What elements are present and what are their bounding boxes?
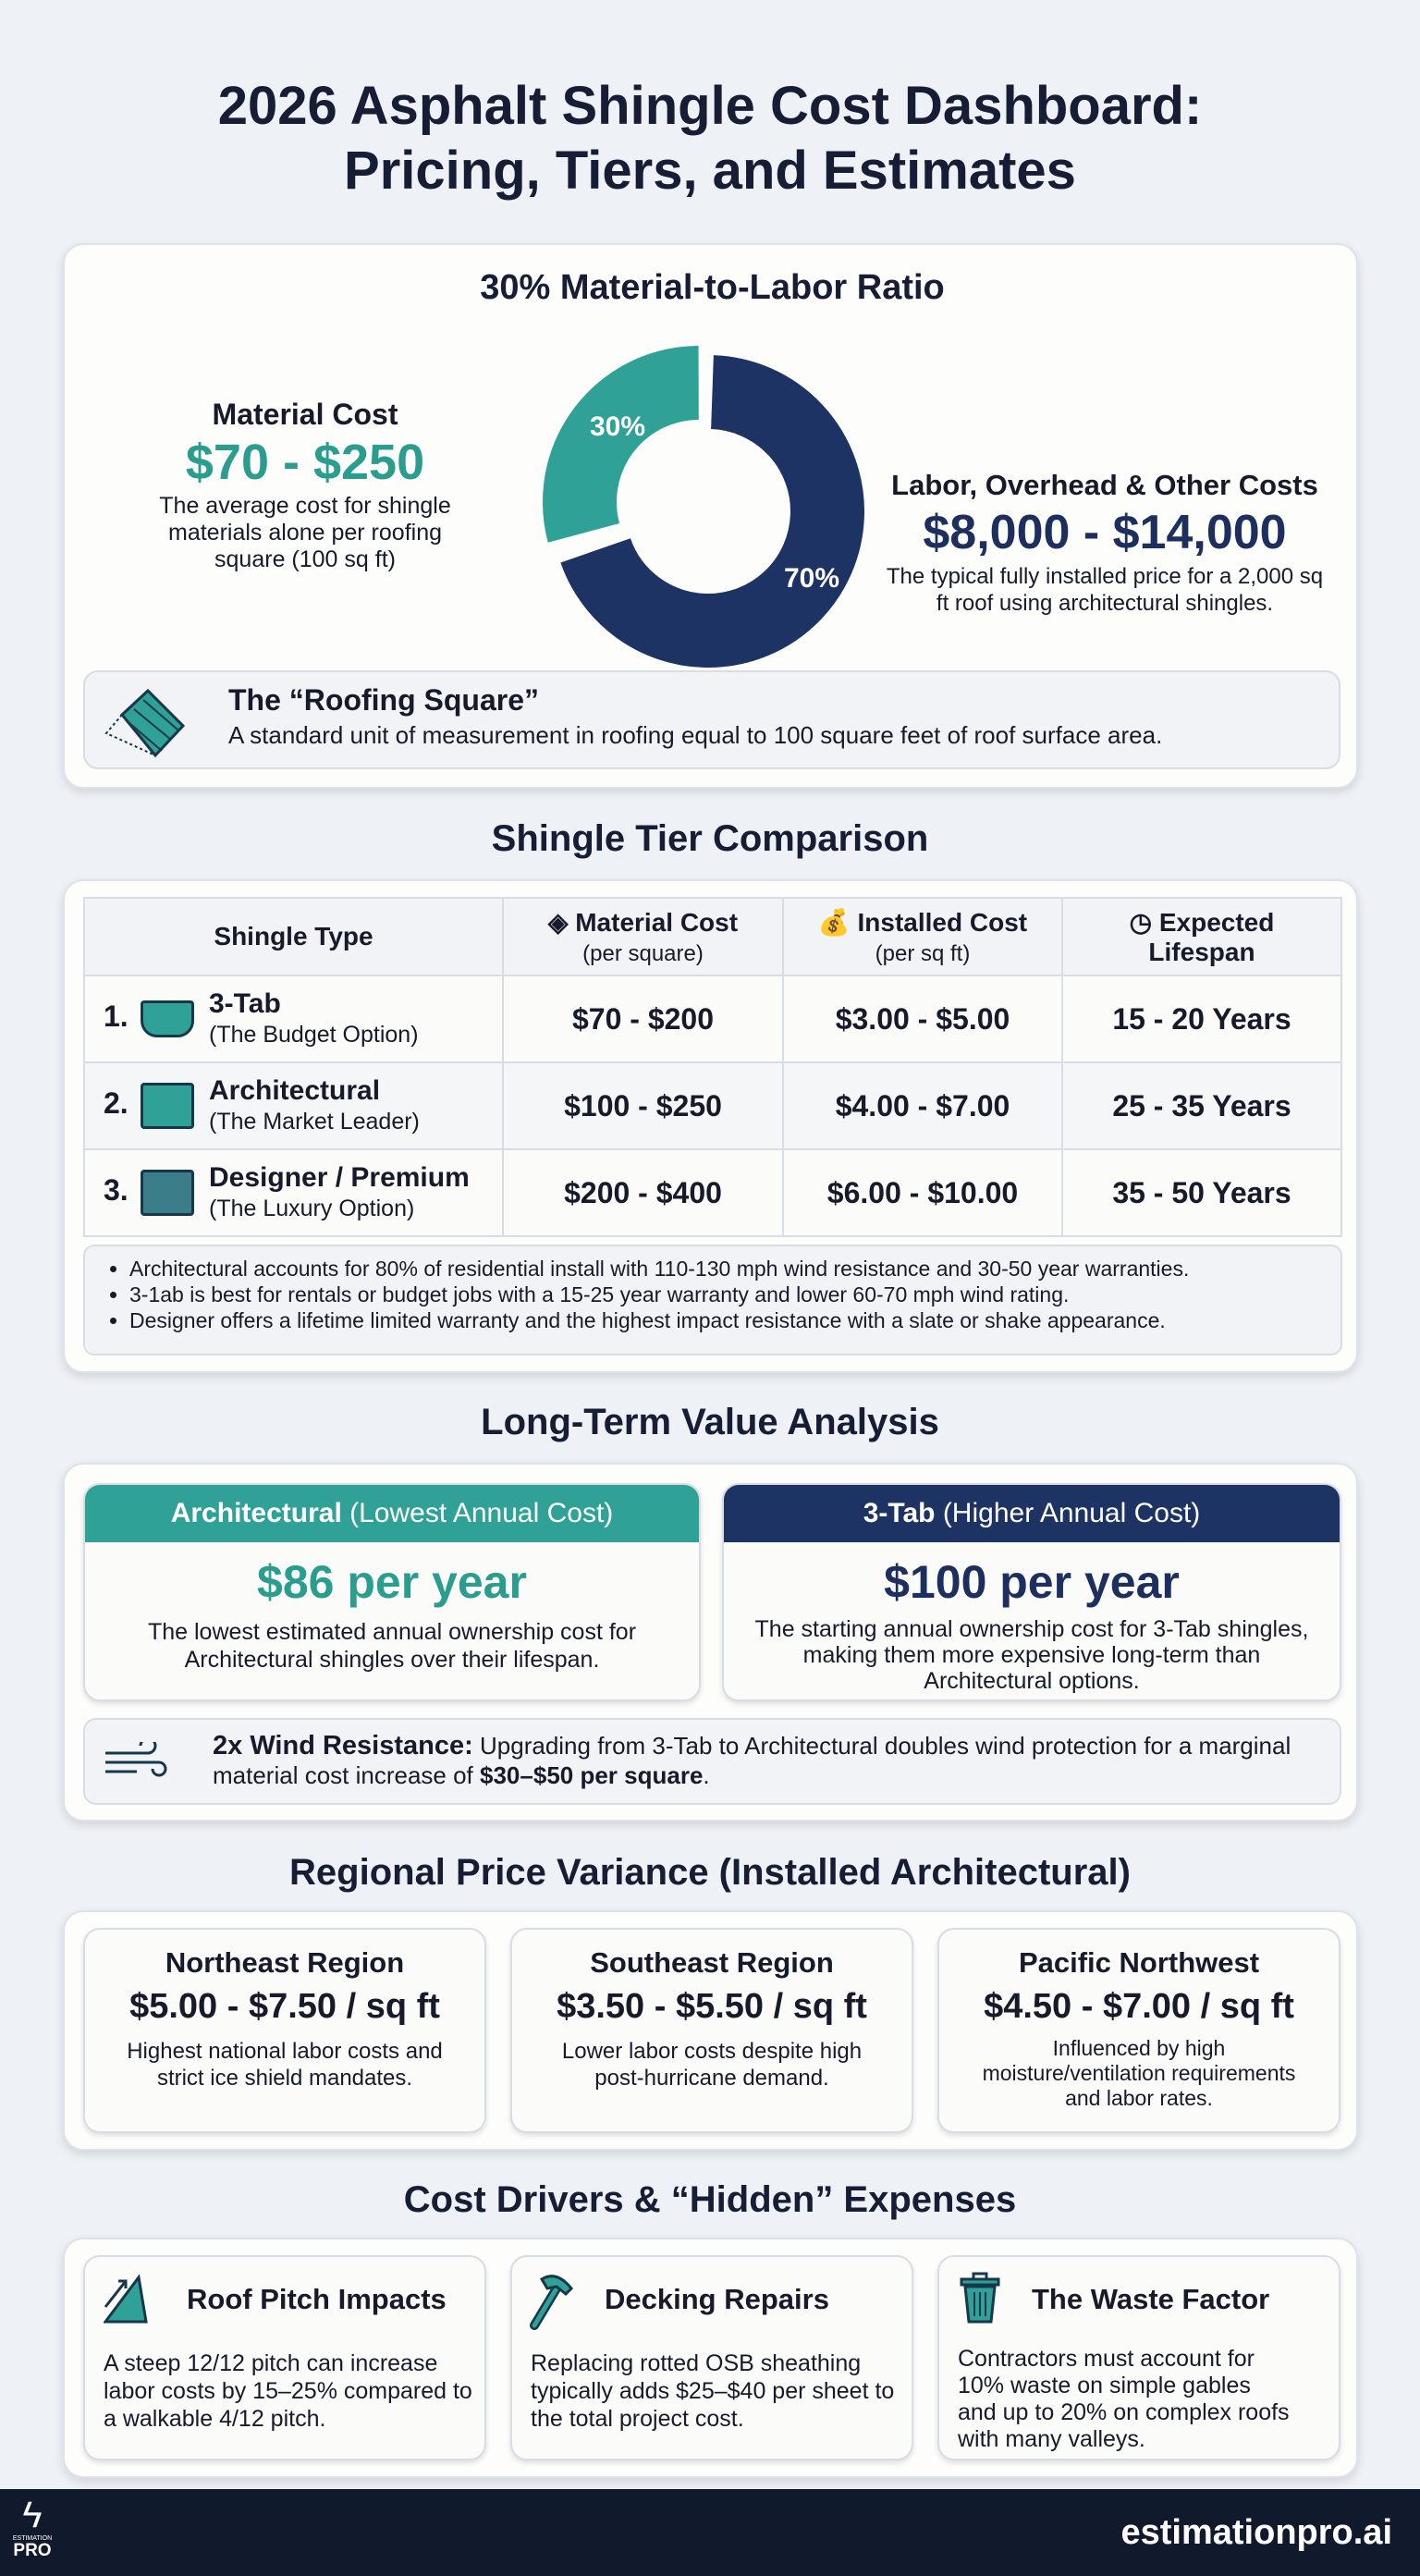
table bbox=[83, 897, 1342, 1237]
table: 15 - 20 Years bbox=[1112, 1002, 1291, 1036]
table: $4.00 - $7.00 bbox=[836, 1089, 1010, 1122]
table: Designer / Premium bbox=[209, 1161, 470, 1193]
panel: material-to-labor ratio bbox=[63, 243, 1358, 789]
table: $200 - $400 bbox=[564, 1176, 722, 1209]
panel: regional bbox=[63, 1910, 1358, 2151]
donut chart: 70% bbox=[784, 563, 839, 594]
material cost block bbox=[159, 398, 451, 572]
heading: long-term value: Long-Term Value Analysis bbox=[481, 1402, 939, 1442]
table: $3.00 - $5.00 bbox=[836, 1002, 1010, 1036]
logo bbox=[13, 2495, 52, 2560]
card: architectural bbox=[83, 1483, 701, 1701]
icon: roof square bbox=[104, 689, 185, 758]
table: $70 - $200 bbox=[572, 1002, 714, 1036]
logo: ϟ bbox=[22, 2495, 43, 2535]
table: (per square) bbox=[582, 941, 704, 965]
logo: PRO bbox=[13, 2541, 52, 2560]
table: 35 - 50 Years bbox=[1112, 1176, 1291, 1209]
table: Lifespan bbox=[1148, 938, 1255, 965]
icon: hammer bbox=[530, 2275, 573, 2330]
table: 1. bbox=[104, 1000, 129, 1033]
title bbox=[218, 76, 1202, 201]
card: southeast: $3.50 - $5.50 / sq ft bbox=[557, 1987, 867, 2026]
table: ◷ Expected bbox=[1130, 908, 1274, 936]
wind resistance callout: 2x Wind Resistance: Upgrading from 3-Tab to Architectural doubles wind protection for a marginal material cost increase of $30–$50 per square. bbox=[213, 1731, 1291, 1789]
material cost block: The average cost for shingle materials alone per roofing square (100 sq ft) bbox=[159, 493, 451, 572]
footer bbox=[0, 2489, 1420, 2576]
donut chart: 30% bbox=[590, 411, 645, 442]
card: southeast: post-hurricane demand. bbox=[594, 2066, 829, 2091]
wind resistance callout bbox=[83, 1718, 1341, 1805]
card: 3-tab: 3-Tab (Higher Annual Cost) bbox=[863, 1498, 1200, 1528]
table: 2. bbox=[104, 1086, 129, 1120]
card: 3-tab: The starting annual ownership cost for 3-Tab shingles, making them more expensive long-term than Architectural options. bbox=[755, 1616, 1308, 1694]
card: northeast: Northeast Region bbox=[165, 1946, 404, 1979]
card: 3-tab bbox=[722, 1483, 1341, 1701]
labor cost block bbox=[887, 469, 1323, 616]
title: Pricing, Tiers, and Estimates bbox=[344, 141, 1076, 201]
card: pacific northwest: $4.50 - $7.00 / sq ft bbox=[984, 1987, 1294, 2026]
logo: ESTIMATION bbox=[13, 2535, 52, 2542]
table: (The Luxury Option) bbox=[209, 1195, 414, 1221]
icon: pitch bbox=[104, 2274, 148, 2323]
table: Shingle Type bbox=[214, 922, 373, 951]
card: architectural: The lowest estimated annual ownership cost for Architectural shingles over their lifespan. bbox=[148, 1619, 636, 1673]
text: roofing square bbox=[228, 683, 1162, 749]
heading: regional variance: Regional Price Variance (Installed Architectural) bbox=[289, 1852, 1131, 1893]
table: $6.00 - $10.00 bbox=[827, 1176, 1018, 1209]
card: southeast: Southeast Region bbox=[590, 1946, 834, 1979]
table: 3-Tab bbox=[209, 987, 281, 1019]
table: 💰 Installed Cost bbox=[818, 908, 1027, 936]
card: southeast bbox=[510, 1928, 913, 2133]
table: (per sq ft) bbox=[875, 941, 970, 965]
text: roofing square: The “Roofing Square” bbox=[228, 683, 539, 717]
card: northeast: strict ice shield mandates. bbox=[157, 2066, 412, 2091]
icon: trash can bbox=[960, 2273, 1000, 2323]
donut chart bbox=[543, 346, 864, 668]
card: architectural: Architectural (Lowest Annual Cost) bbox=[171, 1498, 613, 1528]
card: southeast: Lower labor costs despite high bbox=[562, 2039, 862, 2064]
labor cost block: $8,000 - $14,000 bbox=[923, 506, 1287, 559]
labor cost block: The typical fully installed price for a 2,000 sq ft roof using architectural shingles. bbox=[887, 564, 1323, 616]
website: estimationpro.ai bbox=[1120, 2513, 1392, 2552]
table: Architectural bbox=[209, 1074, 380, 1106]
table: $100 - $250 bbox=[564, 1089, 722, 1122]
card: roof pitch bbox=[83, 2255, 486, 2460]
labor cost block: Labor, Overhead & Other Costs bbox=[891, 469, 1318, 501]
table: (The Budget Option) bbox=[209, 1021, 419, 1047]
card: pacific northwest: Pacific Northwest bbox=[1019, 1946, 1259, 1979]
card: pacific northwest: and labor rates. bbox=[1065, 2086, 1213, 2110]
card: roof pitch: Roof Pitch Impacts bbox=[187, 2283, 447, 2315]
card: decking: Decking Repairs bbox=[605, 2283, 829, 2315]
card: northeast bbox=[83, 1928, 486, 2133]
card: waste factor bbox=[937, 2255, 1340, 2460]
bullet notes bbox=[83, 1245, 1342, 1355]
title: 2026 Asphalt Shingle Cost Dashboard: bbox=[218, 76, 1202, 136]
card: decking bbox=[510, 2255, 913, 2460]
icon: wind bbox=[105, 1742, 166, 1777]
card: waste factor: The Waste Factor bbox=[1032, 2283, 1269, 2315]
card: architectural: $86 per year bbox=[257, 1556, 527, 1608]
heading: ratio: 30% Material-to-Labor Ratio bbox=[480, 268, 945, 307]
material cost block: Material Cost bbox=[213, 398, 398, 431]
table: (The Market Leader) bbox=[209, 1108, 420, 1134]
text: roofing square: A standard unit of measurement in roofing equal to 100 square feet of roof surface area. bbox=[228, 721, 1162, 749]
card: pacific northwest: moisture/ventilation requirements bbox=[983, 2061, 1295, 2085]
table: ◈ Material Cost bbox=[548, 908, 738, 936]
table: 3. bbox=[104, 1173, 129, 1207]
card: waste factor: Contractors must account for 10% waste on simple gables and up to 20% on complex roofs with many valleys. bbox=[958, 2346, 1290, 2452]
card: 3-tab: $100 per year bbox=[884, 1556, 1180, 1608]
card: pacific northwest: Influenced by high bbox=[1053, 2036, 1225, 2060]
heading: cost drivers: Cost Drivers & “Hidden” Expenses bbox=[404, 2179, 1016, 2220]
roofing square callout bbox=[83, 670, 1340, 769]
bullet notes: Designer offers a lifetime limited warranty and the highest impact resistance with a slate or shake appearance. bbox=[129, 1308, 1166, 1332]
card: pacific northwest bbox=[937, 1928, 1340, 2133]
bullet notes: Architectural accounts for 80% of residential install with 110-130 mph wind resistance and 30-50 year warranties. bbox=[129, 1257, 1189, 1281]
table: 25 - 35 Years bbox=[1112, 1089, 1291, 1122]
card: northeast: Highest national labor costs and bbox=[127, 2039, 443, 2064]
card: roof pitch: A steep 12/12 pitch can increase labor costs by 15–25% compared to a walkable 4/12 pitch. bbox=[104, 2350, 472, 2432]
panel: long-term value bbox=[63, 1463, 1358, 1822]
panel: cost drivers bbox=[63, 2238, 1358, 2478]
panel: tier table bbox=[63, 879, 1358, 1373]
heading: tier comparison: Shingle Tier Comparison bbox=[492, 818, 928, 859]
card: northeast: $5.00 - $7.50 / sq ft bbox=[129, 1987, 440, 2026]
card: decking: Replacing rotted OSB sheathing typically adds $25–$40 per sheet to the total project cost. bbox=[531, 2350, 894, 2432]
bullet notes: 3-1ab is best for rentals or budget jobs with a 15-25 year warranty and lower 60-70 mph wind rating. bbox=[129, 1282, 1069, 1306]
material cost block: $70 - $250 bbox=[186, 435, 424, 490]
